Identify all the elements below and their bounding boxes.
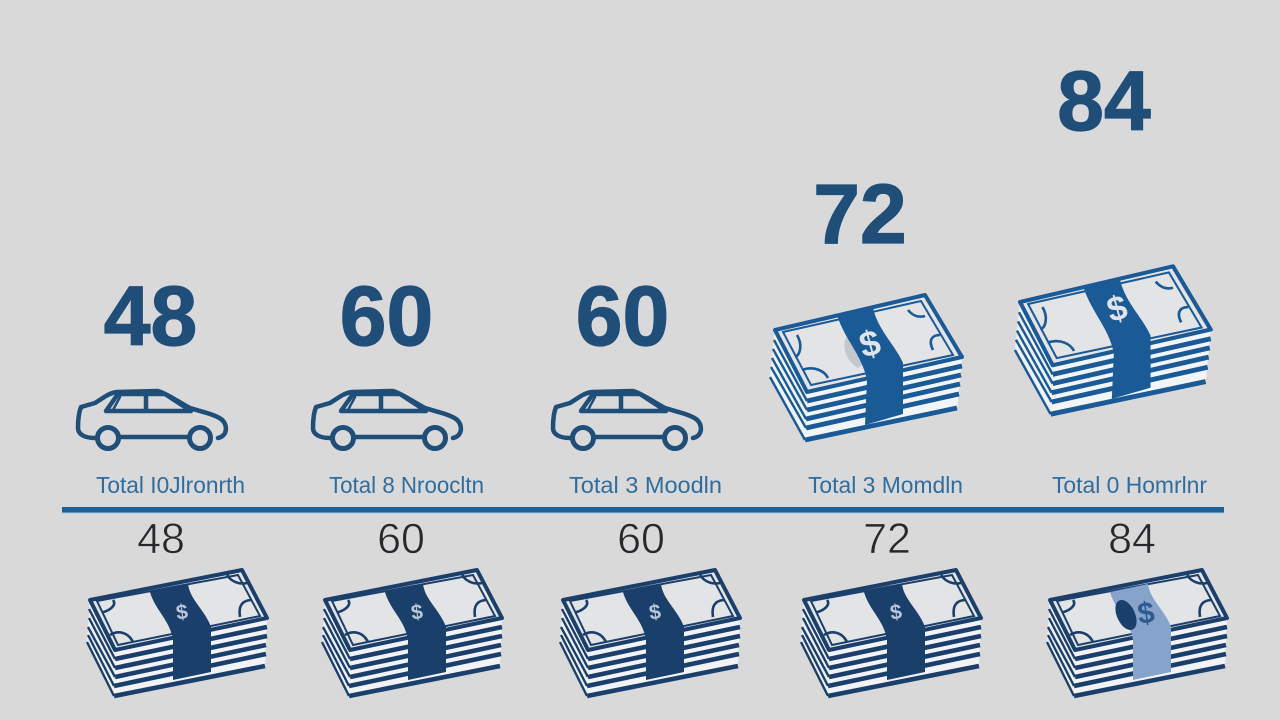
icon: cash stack, column 2: $ xyxy=(410,600,425,625)
big number: 84: 84 xyxy=(1057,54,1151,148)
icon: car 1 xyxy=(78,391,226,448)
label: total months, column 5: Total 0 Homrlnr xyxy=(1052,472,1207,498)
icon: cash stack, column 5 with highlighted band: $ xyxy=(1136,596,1157,631)
icon: cash stack, column 3 xyxy=(560,570,740,698)
icon: cash stack for 72: $ xyxy=(855,321,885,366)
big number: 72: 72 xyxy=(813,167,907,261)
label: total months, column 3: Total 3 Moodln xyxy=(569,472,722,498)
icon: cash stack for 72 xyxy=(770,295,962,442)
icon: cash stack, column 5 with highlighted band xyxy=(1047,570,1227,698)
small number: 48: 48 xyxy=(137,515,185,563)
icon: cash stack, column 3: $ xyxy=(648,600,663,625)
icon: cash stack, column 4: $ xyxy=(889,600,904,625)
icon: cash stack for 84: $ xyxy=(1103,288,1131,330)
icon: cash stack, column 4 xyxy=(801,570,981,698)
icon: cash stack, column 2 xyxy=(322,570,502,698)
icon: cash stack, column 1 xyxy=(87,570,267,698)
icon: cash stack for 84 xyxy=(1015,266,1211,416)
divider line xyxy=(62,507,1224,514)
big number: 60: 60 xyxy=(576,269,669,363)
big number: 60: 60 xyxy=(340,269,433,363)
small number: 60: 60 xyxy=(377,515,425,563)
small number: 72: 72 xyxy=(863,515,911,563)
small number: 60: 60 xyxy=(617,515,665,563)
icon: cash stack, column 1: $ xyxy=(175,600,190,625)
big number: 48: 48 xyxy=(104,269,197,363)
small number: 84: 84 xyxy=(1108,515,1156,563)
icon: car 2 xyxy=(313,391,461,448)
label: total months, column 1: Total I0Jlronrth xyxy=(96,472,245,498)
icon: car 3 xyxy=(553,391,701,448)
label: total months, column 4: Total 3 Momdln xyxy=(808,472,963,498)
label: total months, column 2: Total 8 Nroocltn xyxy=(329,472,484,498)
